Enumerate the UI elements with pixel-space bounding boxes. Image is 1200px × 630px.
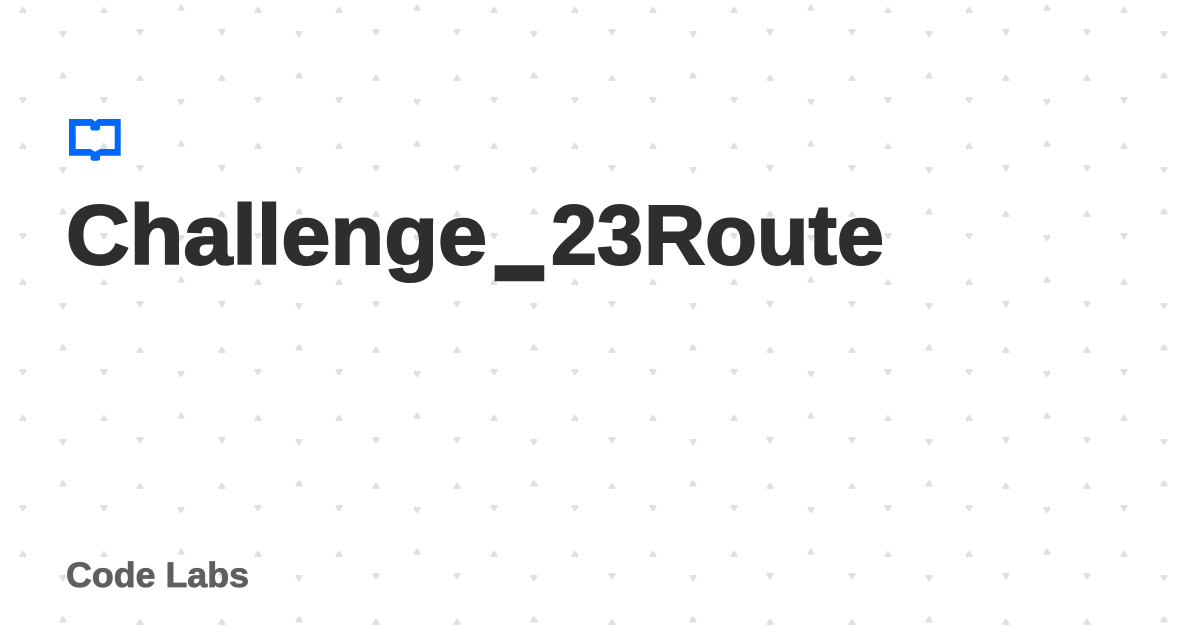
title (66, 0, 884, 320)
title: Route (644, 188, 884, 282)
icon: open book (69, 119, 121, 161)
title: Challenge (66, 188, 487, 282)
title: 23 (551, 188, 643, 282)
footer label: Code Labs (66, 556, 249, 595)
